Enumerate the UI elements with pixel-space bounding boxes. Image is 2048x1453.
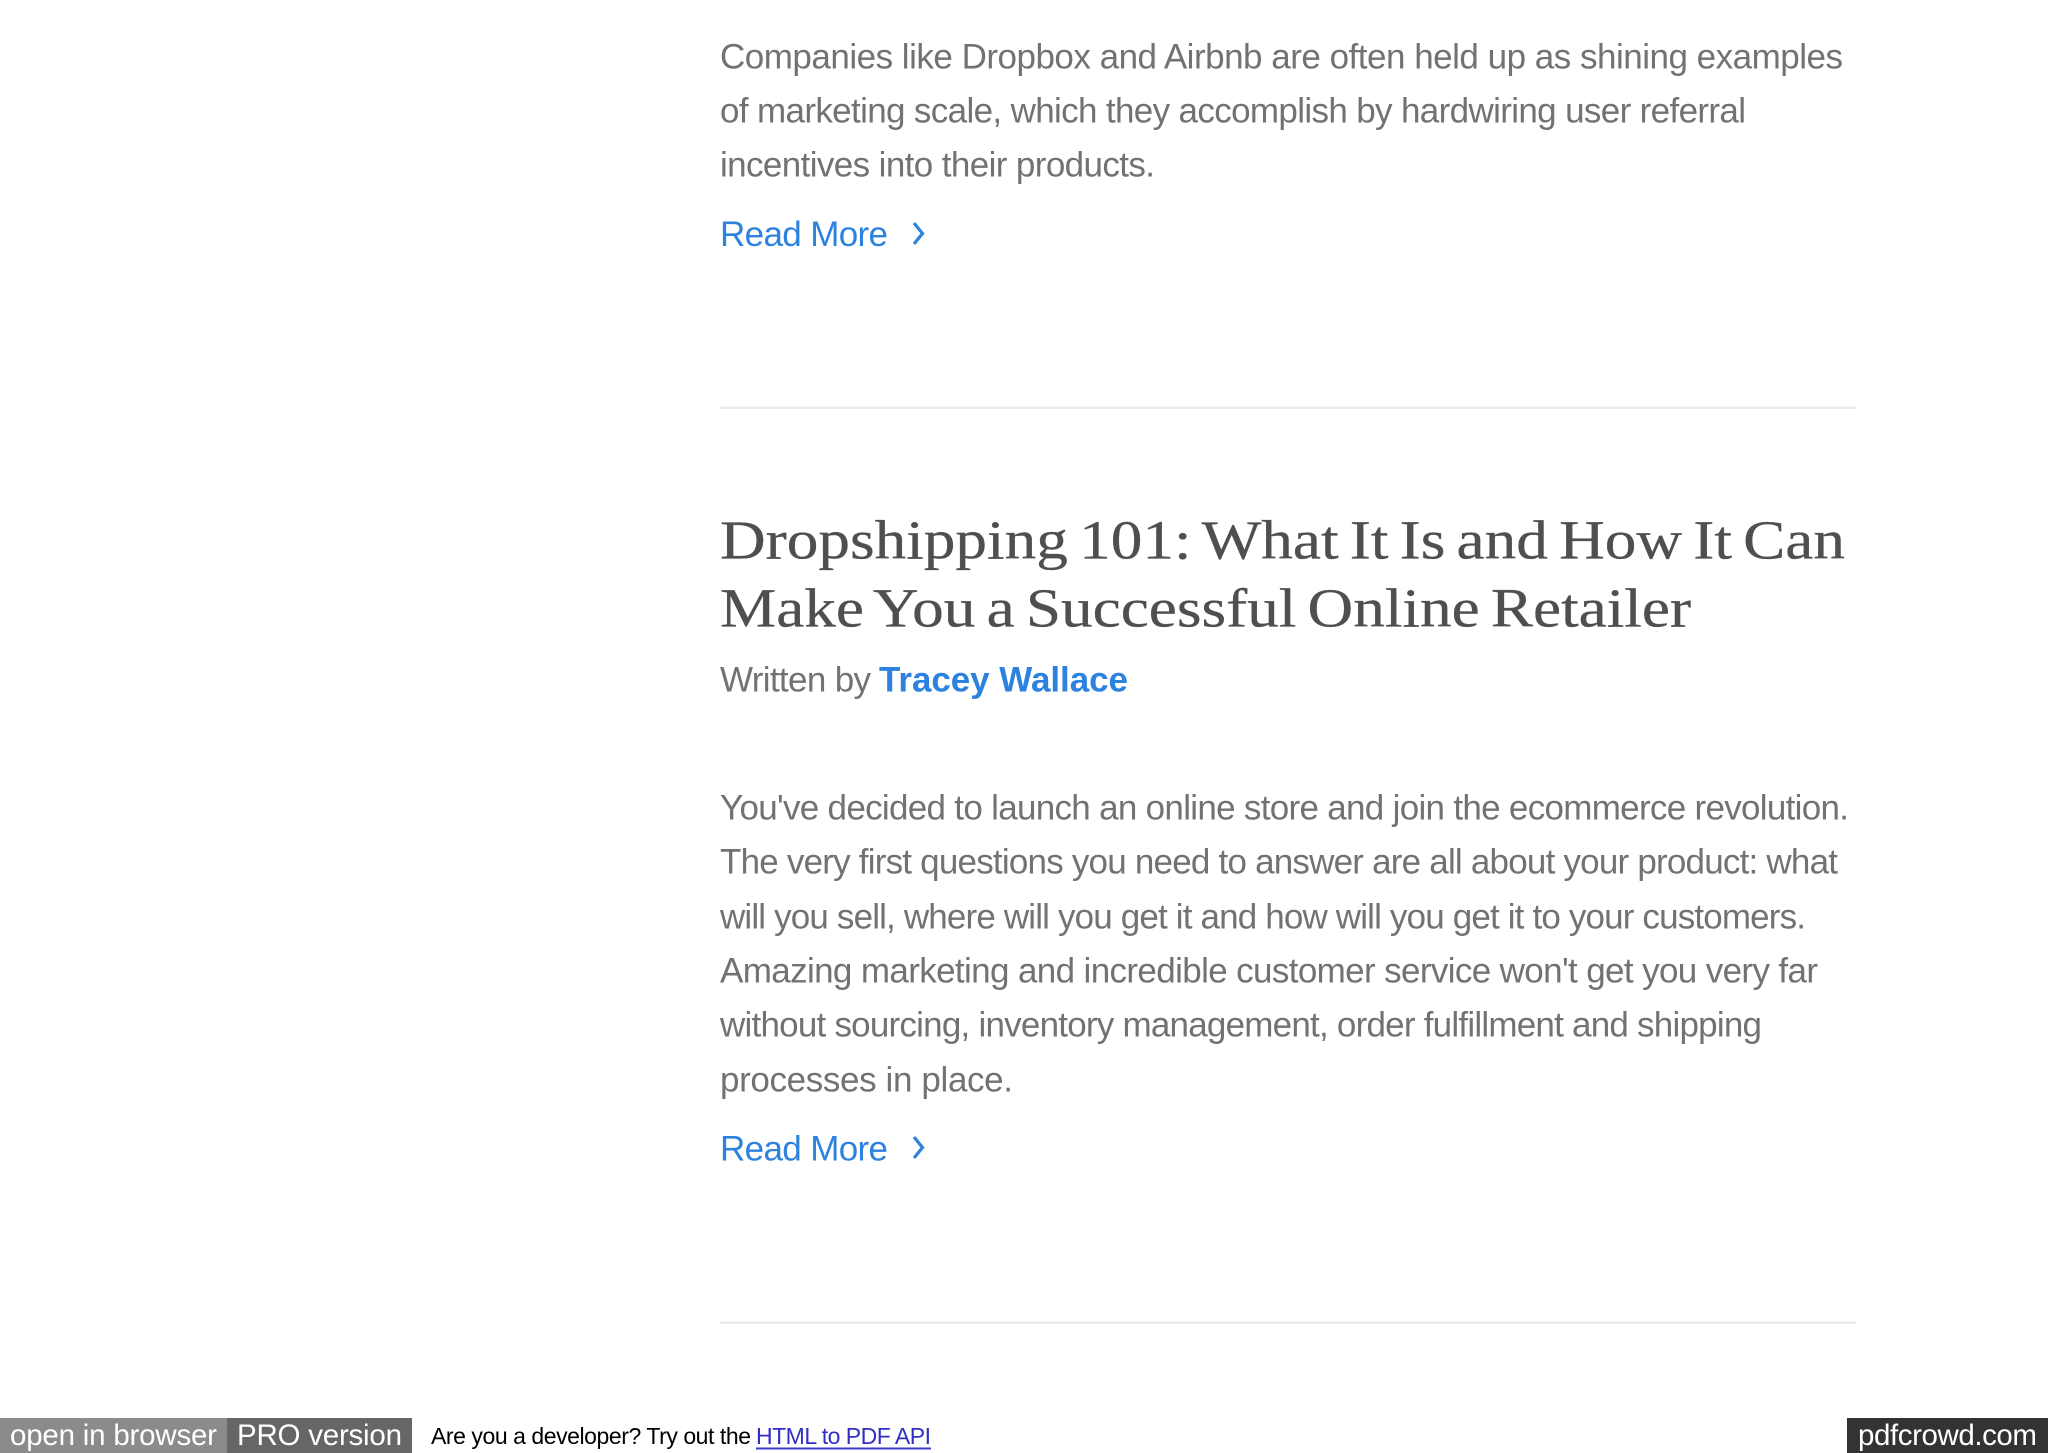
link: read more, first article: Read More [720, 215, 888, 254]
text block: dropshipping article excerpt: Amazing marketing and incredible customer service won't get you very far [720, 952, 1818, 990]
byline: article author: Written by [720, 660, 872, 700]
footer promo text: HTML to PDF API [756, 1423, 931, 1449]
heading: dropshipping article title: Dropshipping 101: What It Is and How It Can [720, 510, 1845, 570]
heading: dropshipping article title [720, 510, 1845, 638]
text block: dropshipping article excerpt: will you sell, where will you get it and how will you get it to your customers. [719, 898, 1806, 936]
text block: first article excerpt: of marketing scale, which they accomplish by hardwiring user referral [720, 92, 1746, 130]
text block: dropshipping article excerpt: The very first questions you need to answer are all about your product: what [720, 842, 1838, 882]
footer promo text [431, 1423, 931, 1450]
link: read more, second article: Read More [720, 1130, 888, 1168]
byline: article author [720, 660, 1128, 700]
text block: first article excerpt [720, 38, 1843, 184]
heading: dropshipping article title: Make You a Successful Online Retailer [720, 578, 1691, 638]
byline: article author: Tracey Wallace [879, 660, 1128, 700]
footer button: open in browser: open in browser [10, 1419, 217, 1452]
text block: dropshipping article excerpt: without sourcing, inventory management, order fulfillment and shipping [719, 1006, 1762, 1044]
text block: first article excerpt: incentives into their products. [720, 146, 1155, 184]
text block: dropshipping article excerpt: You've decided to launch an online store and join the ecommerce revolution. [720, 788, 1849, 828]
footer badge: pdfcrowd.com: pdfcrowd.com [1858, 1419, 2037, 1452]
text block: first article excerpt: Companies like Dropbox and Airbnb are often held up as shining examples [720, 38, 1843, 76]
footer promo text: Are you a developer? Try out the [431, 1423, 751, 1449]
text block: dropshipping article excerpt: processes in place. [720, 1060, 1013, 1100]
text block: dropshipping article excerpt [719, 788, 1849, 1100]
footer button: PRO version: PRO version [237, 1419, 402, 1452]
